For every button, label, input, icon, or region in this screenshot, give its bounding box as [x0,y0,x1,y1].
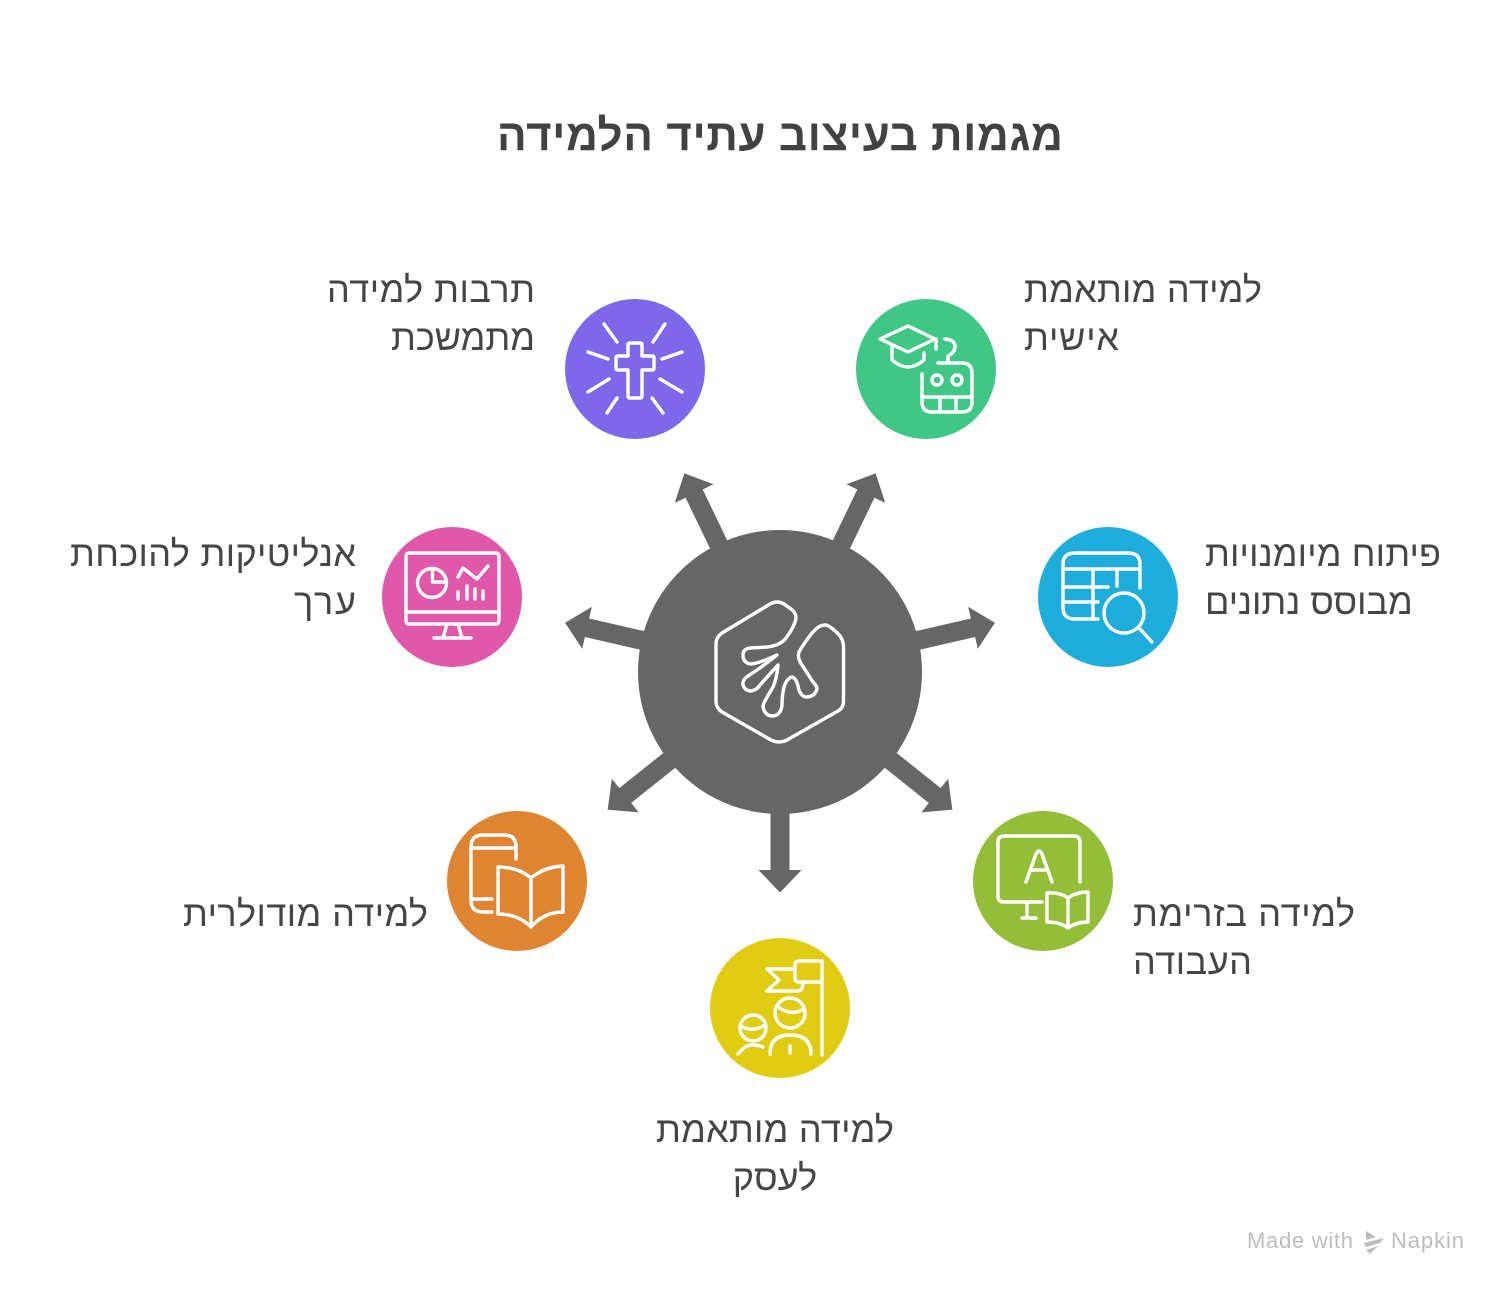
arrow: lower right [851,723,966,826]
item: personalized learning [856,269,1262,439]
arrow: right [880,602,1000,669]
napkin text: Napkin [1391,1228,1464,1253]
icon: central hexagon with hand [716,602,844,742]
label line 2: העבודה [1133,941,1252,982]
arrow: lower left [594,723,709,826]
green circle [856,299,996,439]
central hub with arrows [560,464,1000,892]
arrow: left [560,602,680,669]
icon: monitor with charts [406,553,499,638]
icon: monitor with letter and book [998,836,1088,928]
orange circle [447,811,587,951]
label: פיתוח מיומנויות [1205,533,1441,574]
label: תרבות למידה [327,269,535,310]
purple circle [565,299,705,439]
yellow circle [710,938,850,1078]
title: מגמות בעיצוב עתיד הלמידה [497,111,1063,160]
arrow: upper left [665,464,753,584]
label line 2: לעסק [733,1157,817,1198]
lime circle [973,811,1113,951]
footer watermark [1247,1228,1464,1254]
item: learning in the flow of work [973,811,1355,982]
label: אנליטיקות להוכחת [70,533,356,574]
central circle [638,530,922,814]
blue circle [1038,527,1178,667]
item: modular learning [183,811,587,951]
item: analytics to prove value [70,527,522,667]
icon: people with flag [738,961,822,1055]
label line 2: ערך [294,581,356,622]
icon: graduation cap and robot [880,326,972,412]
made with text: Made with [1247,1228,1353,1253]
item: data-driven skills development [1038,527,1441,667]
arrow: upper right [807,464,895,584]
label: למידה מותאמת [656,1109,894,1150]
item: culture of continuous learning [327,269,705,439]
label: למידה מותאמת [1024,269,1262,310]
icon: phone and book [471,835,563,927]
pink circle [382,527,522,667]
icon: napkin logo [1364,1231,1384,1254]
icon: cross with rays [588,324,682,413]
item: business-tailored learning [656,938,894,1198]
label: למידה בזרימת [1133,893,1355,934]
label line 2: מבוסס נתונים [1205,581,1413,622]
arrow: bottom [758,780,802,892]
label: למידה מודולרית [183,893,428,934]
icon: table with magnifier [1063,553,1152,642]
label line 2: אישית [1024,317,1119,358]
label line 2: מתמשכת [391,317,535,358]
